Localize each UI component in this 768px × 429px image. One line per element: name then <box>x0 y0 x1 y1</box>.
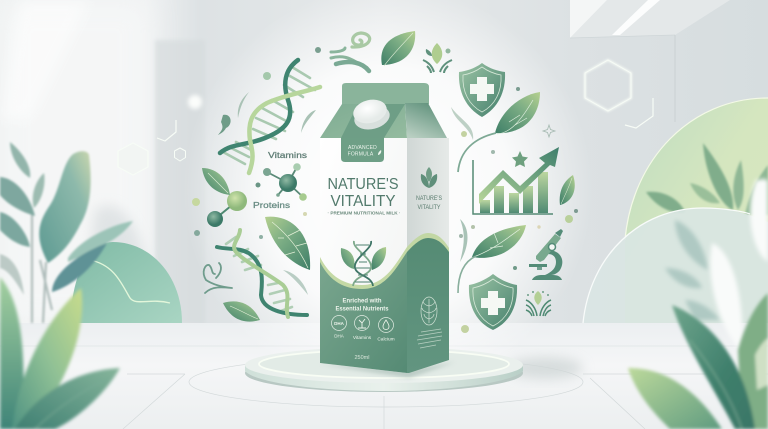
accent dots and swirls <box>188 47 321 295</box>
accent dots <box>459 87 578 333</box>
nutrient: DHA: DHA <box>334 334 344 338</box>
floor lines <box>123 374 768 429</box>
sparkle <box>543 125 555 137</box>
foreground plant: left <box>0 277 120 429</box>
foreground plant: right <box>628 293 768 429</box>
right background domes and plant <box>583 98 768 352</box>
swirl <box>331 33 370 71</box>
dna helix: lower <box>217 230 307 317</box>
white flower petals <box>710 179 768 352</box>
nutrient: Calcium: Calcium <box>377 336 395 342</box>
nutrient: Calcium <box>377 318 395 342</box>
leaf: small right <box>560 175 575 205</box>
shield: lower <box>469 274 517 330</box>
bottle cap <box>351 96 392 133</box>
dome: frosted glass <box>583 208 768 323</box>
nutrient: DHA: DHA <box>334 321 345 326</box>
molecule: proteins <box>207 191 247 227</box>
leaf: small lower <box>223 301 260 322</box>
side brand mark: NATURE'S <box>416 195 443 202</box>
top icon cluster <box>331 31 452 73</box>
nutrient: DHA <box>332 316 346 338</box>
blurred plant leaves <box>0 142 133 323</box>
enriched copy: Enriched with <box>342 298 382 304</box>
carton front panel <box>320 138 407 373</box>
leaf with stem: lower <box>458 219 526 293</box>
enriched copy: Essential Nutrients <box>336 306 389 312</box>
badge: advanced formula: FORMULA <box>348 152 374 158</box>
brand title: VITALITY <box>330 193 396 210</box>
dna helix: upper <box>220 60 320 173</box>
dome: left <box>70 242 182 323</box>
glowing curve <box>90 260 170 303</box>
carton wave: side <box>407 233 449 373</box>
right icon cluster <box>451 63 578 333</box>
leaf <box>202 168 230 195</box>
brand title: · PREMIUM NUTRITIONAL MILK · <box>328 210 400 216</box>
dome: pale green <box>625 98 768 323</box>
brand title <box>328 176 400 216</box>
left background plant <box>0 142 182 323</box>
hexagon outlines <box>118 60 653 175</box>
carton shadow <box>320 362 455 378</box>
brand title: NATURE'S <box>328 176 398 193</box>
emblem: top <box>423 43 452 73</box>
carton side panel <box>407 138 449 373</box>
emblem: lower <box>526 291 551 316</box>
leaves behind glass <box>665 220 720 320</box>
enriched copy <box>336 298 389 312</box>
badge: advanced formula <box>341 138 384 162</box>
badge: advanced formula: ADVANCED <box>348 145 377 151</box>
carton wave: front <box>320 247 407 373</box>
floor ring <box>189 357 583 407</box>
growth chart <box>473 147 559 214</box>
carton top seal <box>342 83 429 104</box>
leaf: top <box>381 31 415 66</box>
side text lines <box>417 329 442 348</box>
side brand mark <box>416 167 443 211</box>
dna leaf icon <box>341 241 386 286</box>
leaves behind dome <box>646 143 768 215</box>
display platform <box>245 347 583 392</box>
volume label: 250ml <box>355 355 369 361</box>
carton gable <box>320 103 447 138</box>
shield: upper <box>459 63 505 117</box>
nutrient: Vitamins <box>353 316 372 341</box>
microscope <box>529 229 563 280</box>
milk carton <box>320 83 455 378</box>
left icon cluster <box>188 47 321 322</box>
label: Proteins: Proteins <box>253 200 290 210</box>
leaf: large <box>265 217 310 270</box>
label: Vitamins: Vitamins <box>268 150 307 160</box>
side brand mark: VITALITY <box>418 204 441 211</box>
molecule: vitamins <box>263 163 307 201</box>
side leaf seal <box>421 297 437 325</box>
central white halo <box>183 0 593 395</box>
leaf with stem: upper <box>451 92 540 172</box>
nutrient: Vitamins: Vitamins <box>353 335 372 341</box>
